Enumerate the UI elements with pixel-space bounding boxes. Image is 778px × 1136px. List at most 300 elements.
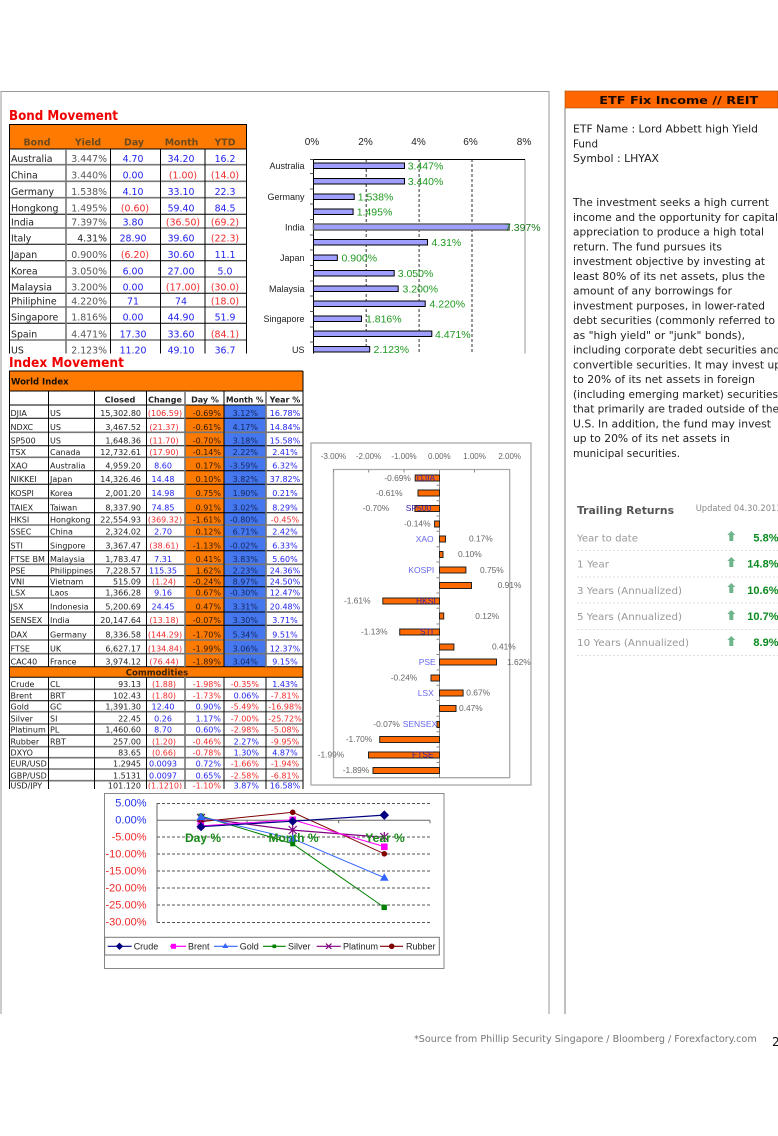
return values: 5.8% [753, 533, 778, 545]
world index rows: 3.18% [233, 436, 258, 445]
text block: fund name and symbol [573, 123, 758, 165]
value labels: 3.440% [408, 176, 443, 188]
world index rows: 15.58% [270, 436, 301, 445]
world index rows: 3.04% [233, 657, 258, 666]
commodity rows: -0.78% [193, 748, 221, 757]
world index rows: -0.24% [193, 577, 221, 586]
category labels: Australia [269, 161, 304, 171]
world index rows: 0.47% [196, 603, 221, 612]
commodity rows: 1.5131 [113, 771, 141, 780]
x axis labels [321, 452, 521, 461]
world index rows: -0.70% [193, 436, 221, 445]
world index rows: 3,367.47 [105, 541, 141, 550]
world index rows: 24.50% [270, 577, 301, 586]
commodity rows: (1.80) [152, 691, 176, 700]
world index rows: SSEC [10, 527, 32, 536]
value labels: 0.10% [458, 549, 482, 559]
world index rows: -1.70% [193, 631, 221, 640]
world index rows: 8.60 [154, 461, 172, 470]
world index rows: 3.31% [233, 603, 258, 612]
text block: investment objective: The investment seeks a high current [572, 196, 770, 209]
world index rows: SP500 [10, 436, 36, 445]
commodity rows: 0.72% [196, 760, 221, 769]
world index rows: 12.37% [270, 644, 301, 653]
commodity rows: 22.45 [118, 715, 141, 724]
text block: investment objective: appreciation to produce a high total [573, 226, 764, 238]
world index rows: UK [50, 644, 62, 653]
world index rows: 74.85 [152, 503, 174, 512]
world index rows: TAIEX [10, 503, 34, 512]
table headers: Change [148, 396, 182, 405]
category labels: Germany [267, 192, 305, 202]
panel frame: right page panel [564, 108, 566, 1014]
text block: investment objective: least 80% of its net assets, plus the [573, 270, 765, 283]
axis labels: 2% [358, 137, 373, 148]
world index rows: France [50, 657, 77, 666]
world index rows: 2.41% [272, 448, 298, 457]
world index rows: 0.12% [196, 527, 221, 536]
table rows: US [11, 345, 24, 356]
world index rows: 12,732.61 [100, 448, 141, 457]
world index rows: 2,324.02 [105, 527, 141, 536]
series: brent [198, 817, 387, 850]
index name labels: HKSI [416, 596, 436, 606]
table rows: Japan [10, 250, 37, 261]
commodity rows: USD/JPY [10, 781, 42, 790]
value labels: -1.13% [361, 626, 388, 636]
world index rows: SENSEX [10, 616, 43, 625]
commodity rows: (1.20) [152, 737, 176, 746]
value labels: 0.900% [342, 252, 377, 264]
world index rows: Australia [50, 461, 85, 470]
series: platinum [197, 813, 388, 842]
commodity rows: 257.00 [113, 737, 141, 746]
commodity rows: Silver [10, 715, 34, 724]
commodity rows: -25.72% [268, 715, 302, 724]
value labels [318, 473, 531, 775]
commodity rows: -1.94% [271, 760, 300, 769]
world index rows: XAO [10, 461, 28, 470]
text block: fund name and symbol: Symbol : LHYAX [573, 152, 659, 165]
table rows: 51.9 [215, 313, 235, 324]
commodity rows: -0.35% [231, 680, 259, 689]
table rows: 7.397% [71, 217, 107, 228]
world index rows: 4,959.20 [105, 461, 141, 470]
world index rows: -0.14% [193, 448, 221, 457]
world index rows: Germany [50, 631, 87, 640]
return values: 14.8% [747, 559, 778, 571]
world index rows: HKSI [10, 516, 29, 525]
table rows: 0.00 [123, 313, 143, 324]
table rows: 34.20 [168, 154, 194, 165]
row labels: 1 Year [577, 560, 610, 571]
world index rows: (76.44) [149, 657, 179, 666]
commodity rows: 1,391.30 [105, 702, 141, 711]
commodity rows: -1.10% [193, 781, 221, 790]
world index rows: 12.47% [270, 589, 301, 598]
table rows: Singapore [11, 313, 59, 324]
index name labels: XAO [416, 534, 434, 544]
table headers [11, 378, 300, 678]
world index rows: 14.98 [152, 489, 174, 498]
row labels [576, 534, 689, 649]
world index rows: -0.61% [193, 423, 221, 432]
commodity rows: 16.58% [270, 781, 301, 790]
panel: trailing returns [576, 504, 778, 656]
world index rows: (11.70) [149, 436, 179, 445]
commodity rows: 0.60% [196, 726, 221, 735]
world index rows: 37.82% [270, 475, 301, 484]
world index rows: 5.60% [272, 555, 298, 564]
world index rows: 0.10% [196, 475, 221, 484]
table headers: World Index [11, 378, 69, 388]
table rows: China [11, 170, 38, 182]
world index rows: 7,228.57 [105, 566, 141, 575]
commodity rows: EUR/USD [10, 760, 47, 769]
table rows: 44.90 [168, 313, 194, 324]
axis labels [305, 138, 531, 145]
legend labels: Gold [240, 942, 259, 952]
x axis labels: -3.00% [321, 452, 346, 461]
legend labels: Crude [134, 942, 158, 952]
world index rows: 3.71% [272, 616, 298, 625]
world index rows: 2.70 [154, 527, 172, 536]
axis labels: 4% [411, 137, 426, 148]
world index rows: (106.59) [148, 409, 182, 418]
y axis labels: -15.00% [106, 866, 147, 878]
table rows: (1.00) [169, 170, 197, 182]
world index rows: Hongkong [50, 516, 90, 525]
world index rows: 1.62% [196, 566, 221, 575]
commodity rows: 93.13 [118, 680, 141, 689]
y axis labels: -10.00% [106, 848, 147, 860]
commodity rows: 0.90% [196, 702, 221, 711]
table rows: Hongkong [11, 204, 58, 215]
world index rows: 14.48 [152, 475, 174, 484]
gridlines and axes [157, 803, 430, 922]
world index rows: 4.17% [233, 423, 258, 432]
world index rows: 6,627.17 [105, 644, 141, 653]
commodity rows: 3.87% [234, 781, 259, 790]
value labels: -1.61% [344, 596, 371, 606]
return values [747, 533, 778, 649]
commodity rows: 1.43% [272, 680, 298, 689]
table rows: 17.30 [120, 329, 146, 340]
x axis labels: 0.00% [428, 452, 451, 461]
value labels: 3.050% [398, 268, 433, 280]
commodity rows: 83.65 [118, 748, 141, 757]
commodity rows: 1.17% [196, 715, 221, 724]
commodity rows: Rubber [10, 737, 40, 746]
commodity rows: PL [50, 726, 60, 735]
footer: source note: *Source from Phillip Security Singapore / Bloomberg / Forexfactory.com [414, 1034, 757, 1045]
world index rows: 24.36% [270, 566, 301, 575]
grid and axes [310, 159, 525, 354]
world index rows: Singpore [50, 541, 86, 550]
bars [314, 163, 509, 352]
text block: investment objective: as "high yield" or "junk" bonds), [573, 329, 745, 342]
world index rows: Philippines [50, 566, 93, 575]
world index rows: PSE [10, 566, 25, 575]
commodity rows: Brent [10, 691, 32, 700]
world index rows: India [50, 616, 70, 625]
world index rows: -1.99% [193, 644, 221, 653]
text block: investment objective: U.S. In addition, the fund may invest [573, 417, 772, 430]
y axis labels: -20.00% [106, 882, 147, 894]
value labels: 2.123% [374, 344, 409, 356]
world index rows: 8,337.90 [105, 503, 141, 512]
category labels [263, 161, 305, 355]
value labels: 0.91% [498, 580, 522, 590]
world index rows: DJIA [10, 409, 27, 418]
legend labels: Silver [288, 942, 311, 952]
world index rows: -3.59% [230, 461, 258, 470]
table rows: 1.816% [71, 313, 107, 324]
world index rows: (38.61) [149, 541, 179, 550]
commodity rows: 1,460.60 [105, 726, 141, 735]
value labels: 0.47% [459, 703, 483, 713]
text block: investment objective: municipal securities. [573, 447, 680, 460]
value labels: -1.99% [318, 750, 345, 760]
world index rows: 14,326.46 [100, 475, 141, 484]
commodity rows: SI [50, 715, 57, 724]
row dividers [577, 550, 778, 656]
world index rows: 6.33% [272, 541, 298, 550]
table: bond movement [9, 124, 246, 356]
table headers: Year % [269, 396, 300, 405]
value labels [342, 160, 541, 356]
commodity rows: 0.0097 [149, 771, 177, 780]
return values: 10.6% [747, 585, 778, 597]
world index rows: 3.30% [233, 616, 258, 625]
y axis labels: -5.00% [112, 832, 147, 844]
value labels: -0.14% [404, 518, 431, 528]
table rows: 71 [127, 296, 139, 307]
table rows: Philiphine [11, 296, 57, 307]
value labels: -0.61% [376, 488, 403, 498]
world index rows: VNI [10, 577, 24, 586]
trailing returns heading: Trailing Returns [577, 504, 674, 517]
row labels: 3 Years (Annualized) [577, 586, 682, 597]
x axis labels: 2.00% [498, 452, 521, 461]
panel frame: left page panel [1, 92, 549, 1014]
legend labels: Platinum [343, 942, 378, 952]
table rows: (14.0) [211, 170, 239, 182]
commodity rows: (0.66) [152, 748, 176, 757]
commodity rows: -7.00% [231, 715, 259, 724]
index name labels: KOSPI [408, 565, 434, 575]
bar chart: index day change [311, 443, 531, 785]
world index rows: 0.17% [196, 461, 221, 470]
world index rows: 2.22% [233, 448, 258, 457]
commodity rows: 8.70 [154, 726, 172, 735]
world index rows: 3.06% [233, 644, 258, 653]
world index rows: 3.83% [233, 555, 258, 564]
table rows: 4.31% [77, 234, 107, 245]
world index rows: US [50, 409, 61, 418]
commodity rows: -7.81% [271, 691, 300, 700]
value labels: 1.495% [357, 206, 392, 218]
table rows: 0.00 [123, 170, 143, 182]
world index rows: (13.18) [149, 616, 179, 625]
table rows: (17.00) [166, 283, 200, 294]
table headers: Day % [191, 396, 219, 405]
world index rows: US [50, 423, 61, 432]
world index rows: Canada [50, 448, 81, 457]
table rows: Italy [11, 234, 32, 245]
text block: investment objective: investment objective by investing at [573, 255, 766, 268]
row labels: Year to date [576, 534, 638, 545]
commodity rows: -5.49% [231, 702, 259, 711]
world index rows: -1.61% [193, 516, 221, 525]
category labels [185, 831, 405, 845]
table rows: 0.900% [71, 250, 107, 261]
world index rows: STI [10, 541, 23, 550]
bar chart: bond yields [263, 137, 541, 356]
world index rows: 9.15% [272, 657, 298, 666]
world index rows: -1.13% [193, 541, 221, 550]
world index rows: 15,302.80 [100, 409, 141, 418]
table rows: 6.00 [123, 266, 143, 277]
commodity rows: BRT [50, 691, 65, 700]
y axis labels: 5.00% [115, 798, 147, 810]
table header [9, 124, 246, 149]
table rows: 2.123% [71, 345, 107, 356]
value labels: 4.220% [430, 298, 465, 310]
value labels: 1.62% [507, 657, 531, 667]
legend lines and markers [108, 943, 403, 949]
index name labels: LSX [418, 688, 434, 698]
world index rows: -0.07% [193, 616, 221, 625]
world index rows: (134.84) [148, 644, 182, 653]
text block: investment objective: return. The fund pursues its [573, 240, 722, 253]
text block: investment objective: amount of any borrowings for [573, 284, 732, 298]
world index rows: 8.97% [233, 577, 258, 586]
table rows: (30.0) [211, 283, 239, 294]
world index rows: LSX [10, 589, 26, 598]
world index rows: 3,467.52 [105, 423, 141, 432]
heading: Index Movement: Index Movement [9, 356, 124, 371]
axis labels: 8% [517, 137, 531, 148]
world index rows: 1,783.47 [105, 555, 141, 564]
commodity rows: (1.1210) [148, 781, 182, 790]
table rows: 11.1 [215, 250, 235, 261]
world index rows: Japan [49, 475, 72, 484]
world index rows: 1,366.28 [105, 589, 141, 598]
value labels: 0.41% [492, 642, 516, 652]
world index rows: Vietnam [50, 577, 84, 586]
colored bands [9, 371, 303, 678]
y axis labels: -25.00% [106, 900, 147, 912]
commodity rows: 0.06% [234, 691, 259, 700]
table rows: Spain [11, 329, 37, 340]
world index rows: KOSPI [10, 489, 34, 498]
commodity rows: Platinum [10, 726, 46, 735]
world index rows: 9.16 [154, 589, 172, 598]
world index rows: 3.82% [233, 475, 258, 484]
category labels: Singapore [263, 314, 304, 324]
value labels: 3.447% [408, 160, 443, 172]
commodity rows: 0.65% [196, 771, 221, 780]
table rows: 22.3 [215, 187, 235, 198]
table rows: 27.00 [168, 266, 194, 277]
table rows: 74 [175, 296, 187, 307]
commodity rows: -9.95% [271, 737, 300, 746]
row labels: 5 Years (Annualized) [577, 612, 682, 623]
category labels: Month % [268, 831, 319, 845]
table grid [9, 371, 303, 789]
table rows: 33.10 [168, 187, 194, 198]
table rows: (84.1) [211, 329, 239, 340]
world index rows: 24.45 [152, 603, 174, 612]
world index rows: -0.80% [230, 516, 258, 525]
x axis labels: -2.00% [356, 452, 381, 461]
table rows [10, 154, 239, 356]
table headers: Closed [105, 395, 135, 405]
commodity rows: Gold [10, 702, 29, 711]
world index rows: NIKKEI [10, 475, 37, 484]
commodity rows: -2.98% [231, 726, 259, 735]
world index rows: 2.23% [233, 566, 258, 575]
commodity rows: -2.58% [231, 771, 259, 780]
table rows: Korea [11, 266, 38, 277]
table rows: (36.50) [166, 217, 200, 228]
return values: 8.9% [753, 637, 778, 649]
value labels: 7.397% [505, 222, 541, 234]
world index rows: 8,336.58 [105, 631, 141, 640]
up arrows [727, 531, 735, 646]
world index rows: 14.84% [270, 423, 301, 432]
world index rows [10, 409, 301, 666]
world index rows: 6.32% [272, 461, 298, 470]
table rows: 36.7 [215, 345, 235, 356]
y axis labels [106, 798, 147, 928]
world index rows: 0.41% [196, 555, 221, 564]
commodity rows: 0.0093 [149, 760, 177, 769]
table rows: (18.0) [211, 296, 239, 307]
commodity rows: 102.43 [113, 691, 141, 700]
category labels: Day % [185, 831, 221, 845]
table rows: 11.20 [120, 345, 146, 356]
value labels: 3.200% [402, 284, 438, 296]
text block: investment objective: investment purposes, in lower-rated [573, 299, 765, 312]
category labels: India [285, 222, 304, 232]
value labels: 0.67% [466, 688, 491, 698]
commodity rows: GBP/USD [10, 771, 47, 780]
text block: fund name and symbol: Fund [573, 138, 598, 150]
index name labels: SENSEX [403, 719, 438, 729]
category labels: Malaysia [269, 284, 304, 294]
world index rows: 3.02% [233, 503, 258, 512]
commodity rows: (1.88) [152, 680, 176, 689]
heading: Bond Movement: Bond Movement [9, 109, 118, 124]
index name labels: PSE [419, 657, 436, 667]
text block: investment objective [572, 196, 778, 460]
world index rows: 0.67% [196, 589, 221, 598]
return values: 10.7% [747, 611, 778, 623]
world index rows: US [50, 436, 61, 445]
commodity rows: -5.08% [271, 726, 300, 735]
index name labels: STI [420, 626, 433, 636]
index name labels: SP500 [406, 503, 431, 513]
world index rows: (369.32) [148, 516, 182, 525]
header: ETF Fix Income // REIT: ETF Fix Income // REIT [599, 94, 759, 107]
value labels: -0.07% [373, 719, 400, 729]
world index rows: FTSE [10, 644, 30, 653]
world index rows: 22,554.93 [100, 516, 141, 525]
y axis labels: 0.00% [115, 814, 147, 826]
legend labels: Rubber [406, 942, 436, 952]
